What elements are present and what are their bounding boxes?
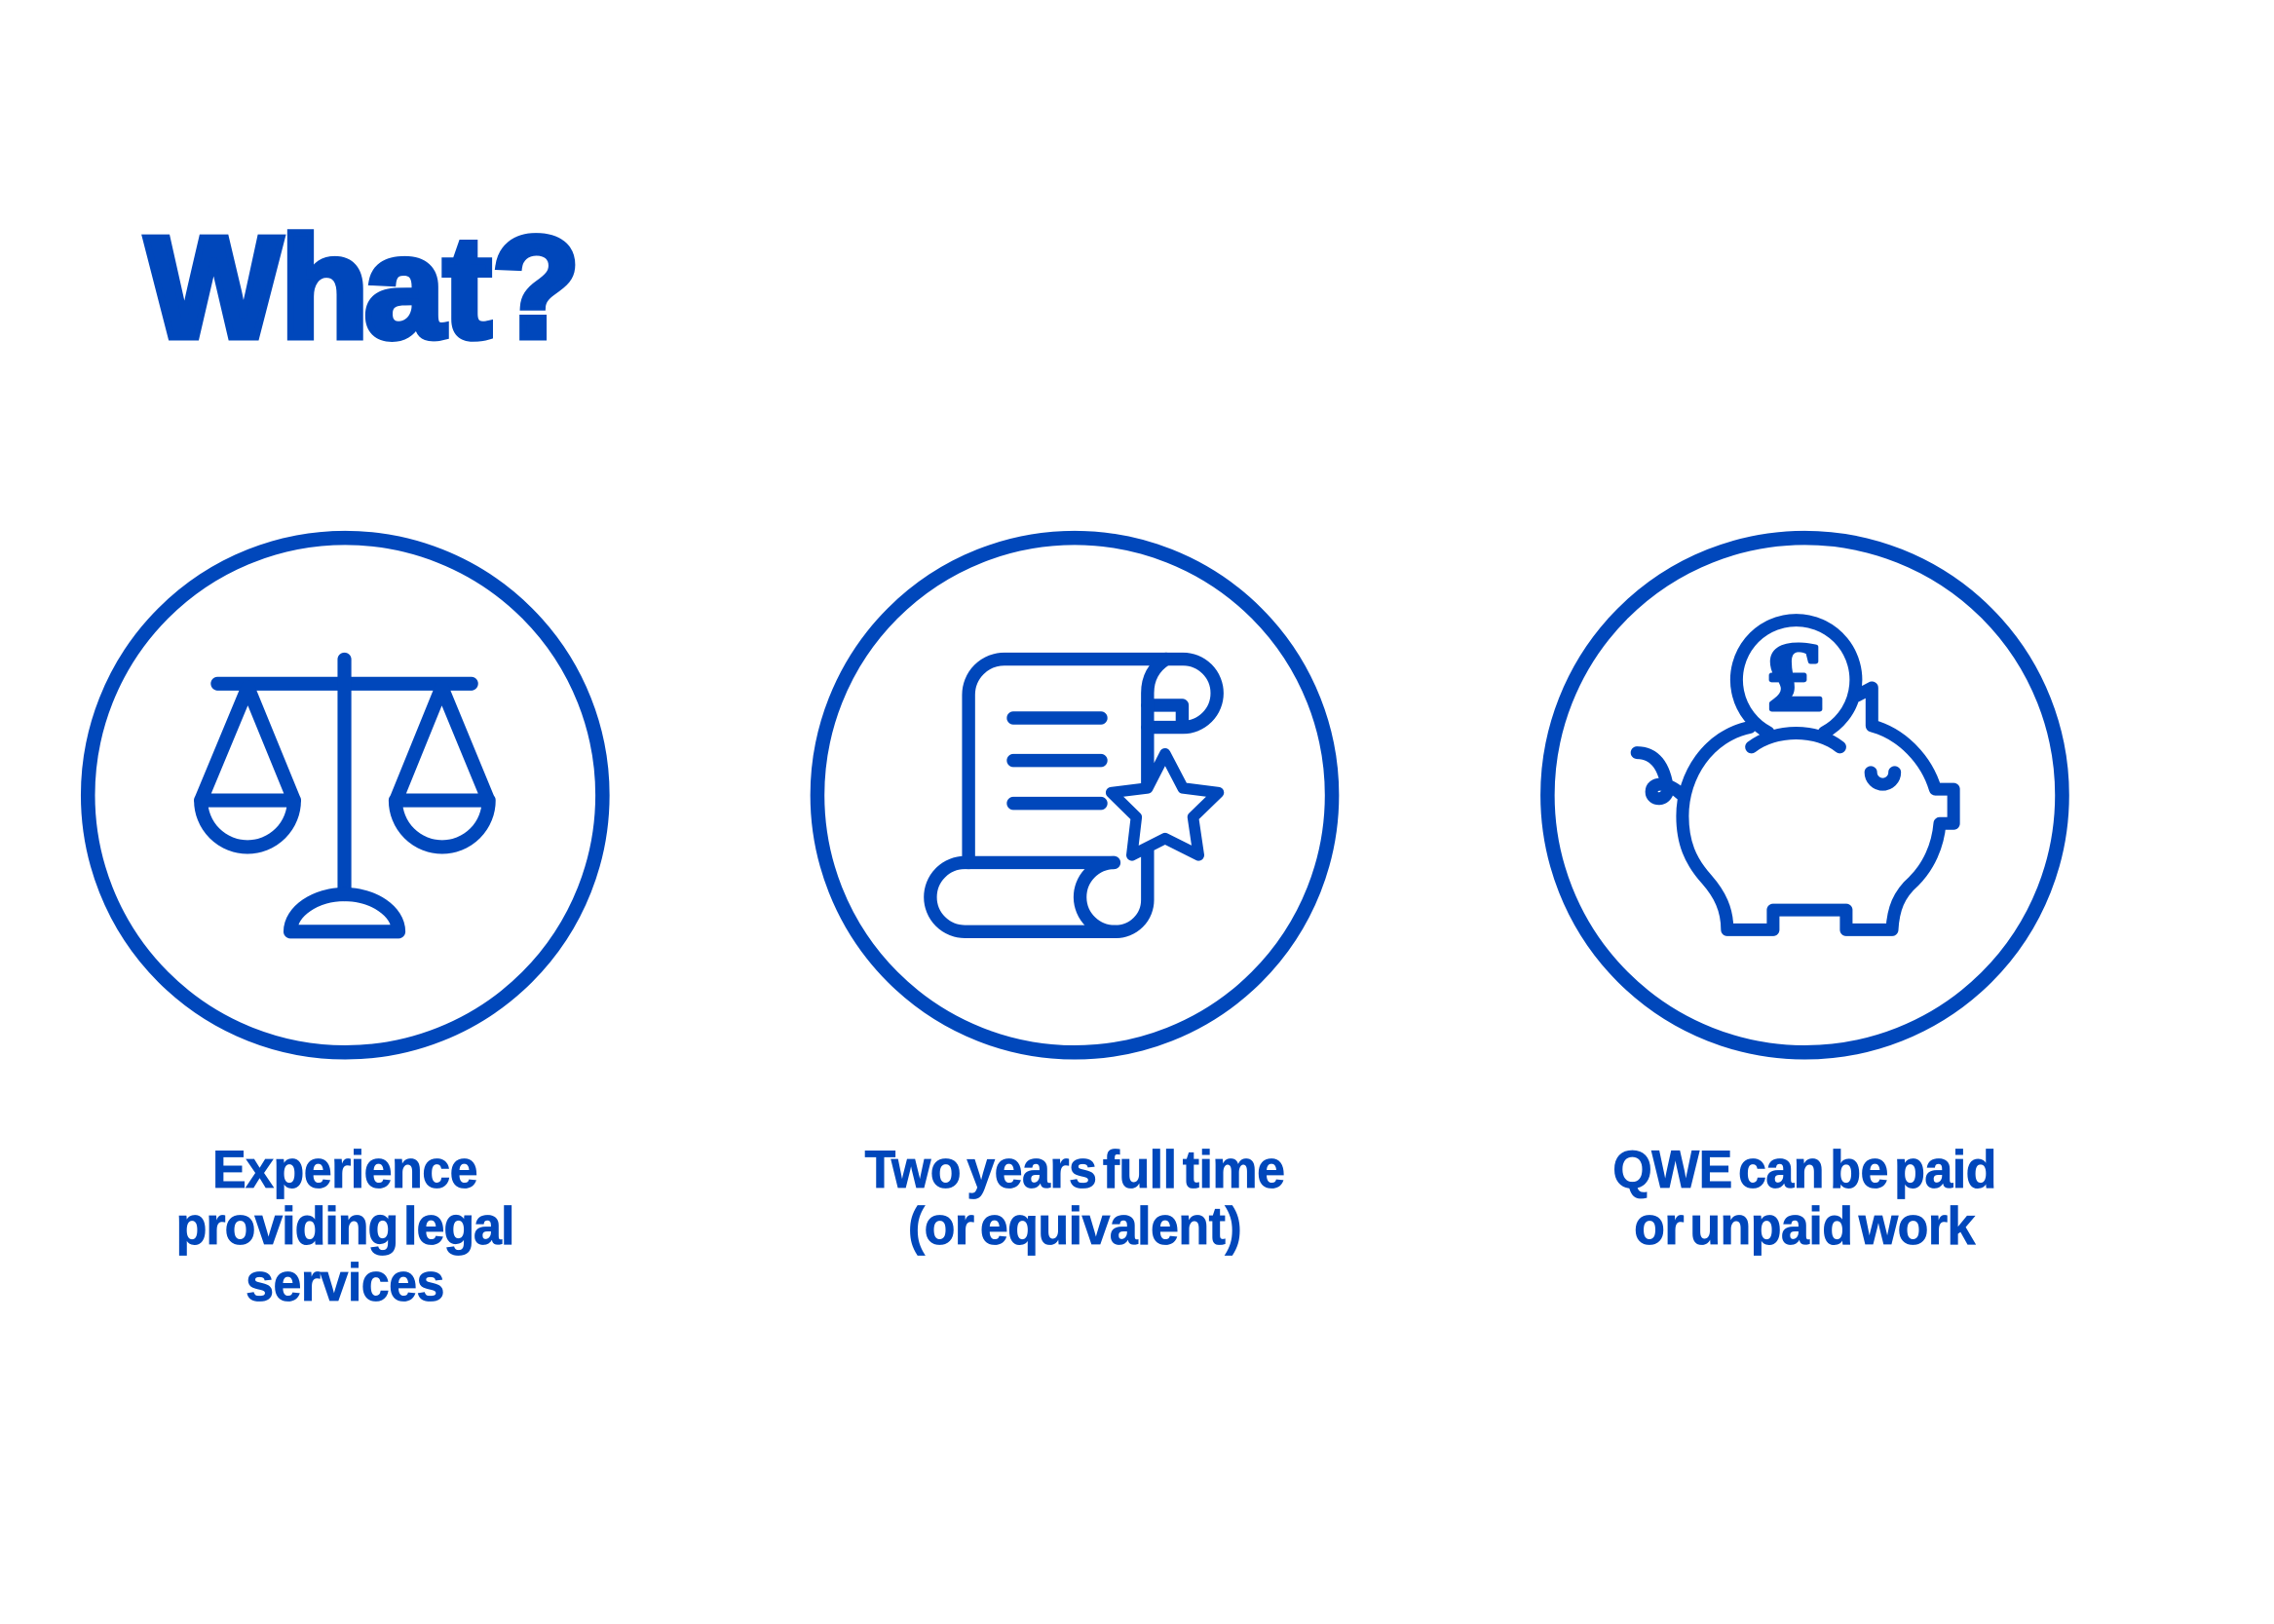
label: experience: services [246,1254,444,1312]
panel: pay [1547,538,2062,1256]
label: experience: Experience [212,1141,477,1199]
title: What? [146,208,580,368]
panel: experience [88,538,602,1312]
icon: scroll with star in circle [817,538,1332,1052]
panel: duration [817,538,1332,1256]
icon: pound sign: £ [1767,623,1823,731]
label: pay: or unpaid work [1634,1197,1976,1256]
icon: scales in circle [88,538,602,1052]
label: pay: QWE can be paid [1612,1141,1996,1199]
icon: piggy bank with pound coin in circle [1547,538,2062,1052]
label: experience: providing legal [176,1197,513,1256]
label: duration: (or equivalent) [908,1197,1241,1256]
label: duration: Two years full time [865,1141,1284,1199]
